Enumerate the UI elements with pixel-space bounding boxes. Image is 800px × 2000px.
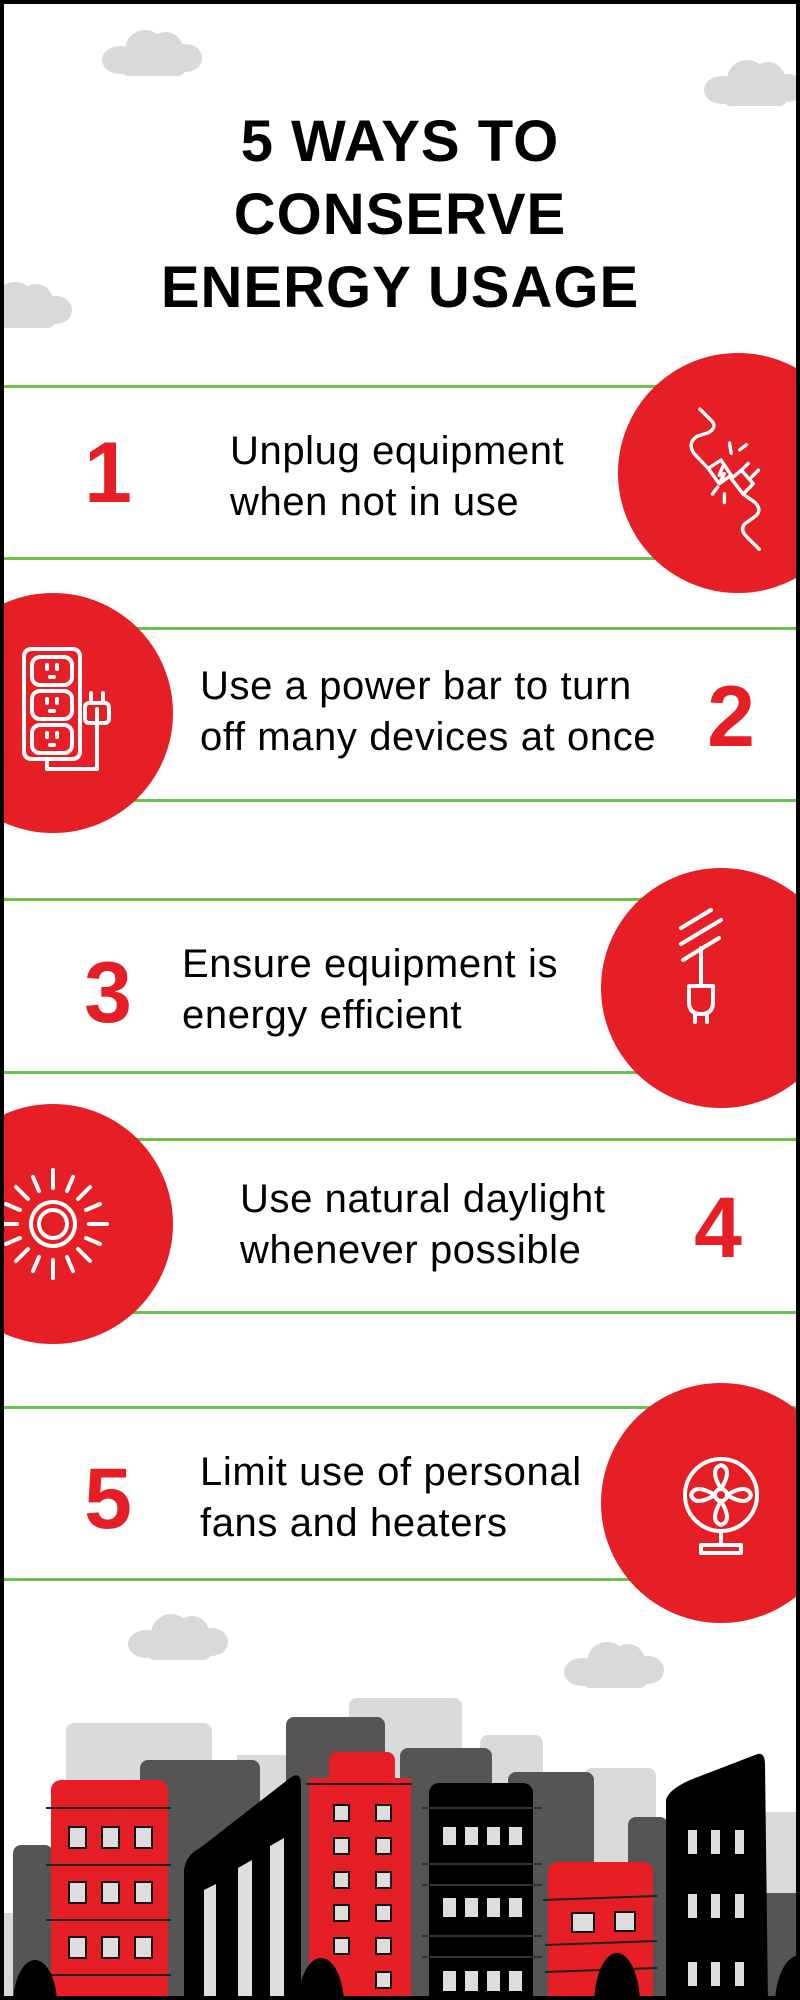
title: CONSERVE bbox=[234, 182, 566, 247]
cloud bottom right bbox=[564, 1642, 664, 1688]
icon circle: fan bbox=[601, 1383, 800, 1623]
number 5: 5 bbox=[84, 1451, 132, 1547]
title: ENERGY USAGE bbox=[161, 255, 639, 320]
text 5: fans and heaters bbox=[200, 1501, 508, 1545]
text 3: Ensure equipment is bbox=[182, 942, 558, 986]
icon circle: lamp bbox=[601, 868, 800, 1108]
building D black bbox=[422, 1783, 542, 2000]
text 4 bbox=[240, 1177, 606, 1272]
cloud left bbox=[4, 282, 72, 328]
number 3: 3 bbox=[84, 945, 132, 1041]
text 3 bbox=[182, 942, 558, 1037]
building E red bbox=[543, 1862, 657, 2000]
text 5: Limit use of personal bbox=[200, 1450, 582, 1494]
building A red bbox=[46, 1780, 171, 2000]
building F black bbox=[666, 1754, 768, 2000]
cloud top left bbox=[102, 30, 202, 76]
title bbox=[161, 109, 639, 320]
number 2: 2 bbox=[707, 669, 755, 765]
step 5 bbox=[84, 1383, 796, 1623]
text 5 bbox=[200, 1450, 582, 1545]
step 3 bbox=[84, 868, 796, 1108]
text 2: off many devices at once bbox=[200, 715, 656, 759]
icon circle: power bar bbox=[0, 593, 173, 833]
cloud bottom left bbox=[128, 1614, 228, 1660]
text 1: Unplug equipment bbox=[230, 429, 564, 473]
icon circle: sun bbox=[0, 1104, 173, 1344]
building C red bbox=[306, 1752, 412, 2000]
text 2: Use a power bar to turn bbox=[200, 664, 632, 708]
cloud top right bbox=[704, 60, 796, 106]
text 4: Use natural daylight bbox=[240, 1177, 606, 1221]
step 2 bbox=[4, 593, 755, 833]
text 2 bbox=[200, 664, 656, 759]
text 1 bbox=[230, 429, 564, 524]
city skyline illustration bbox=[4, 1698, 796, 1996]
building B black bbox=[184, 1775, 301, 2000]
icon circle: unplug bbox=[618, 353, 800, 593]
text 4: whenever possible bbox=[240, 1228, 582, 1272]
step 4 bbox=[4, 1104, 742, 1344]
step 1 bbox=[84, 353, 796, 593]
trees bbox=[13, 1953, 800, 2000]
text 3: energy efficient bbox=[182, 993, 462, 1037]
number 1: 1 bbox=[84, 425, 132, 521]
title: 5 WAYS TO bbox=[241, 109, 559, 174]
number 4: 4 bbox=[694, 1180, 742, 1276]
green lines bbox=[4, 376, 796, 1581]
text 1: when not in use bbox=[230, 480, 519, 524]
